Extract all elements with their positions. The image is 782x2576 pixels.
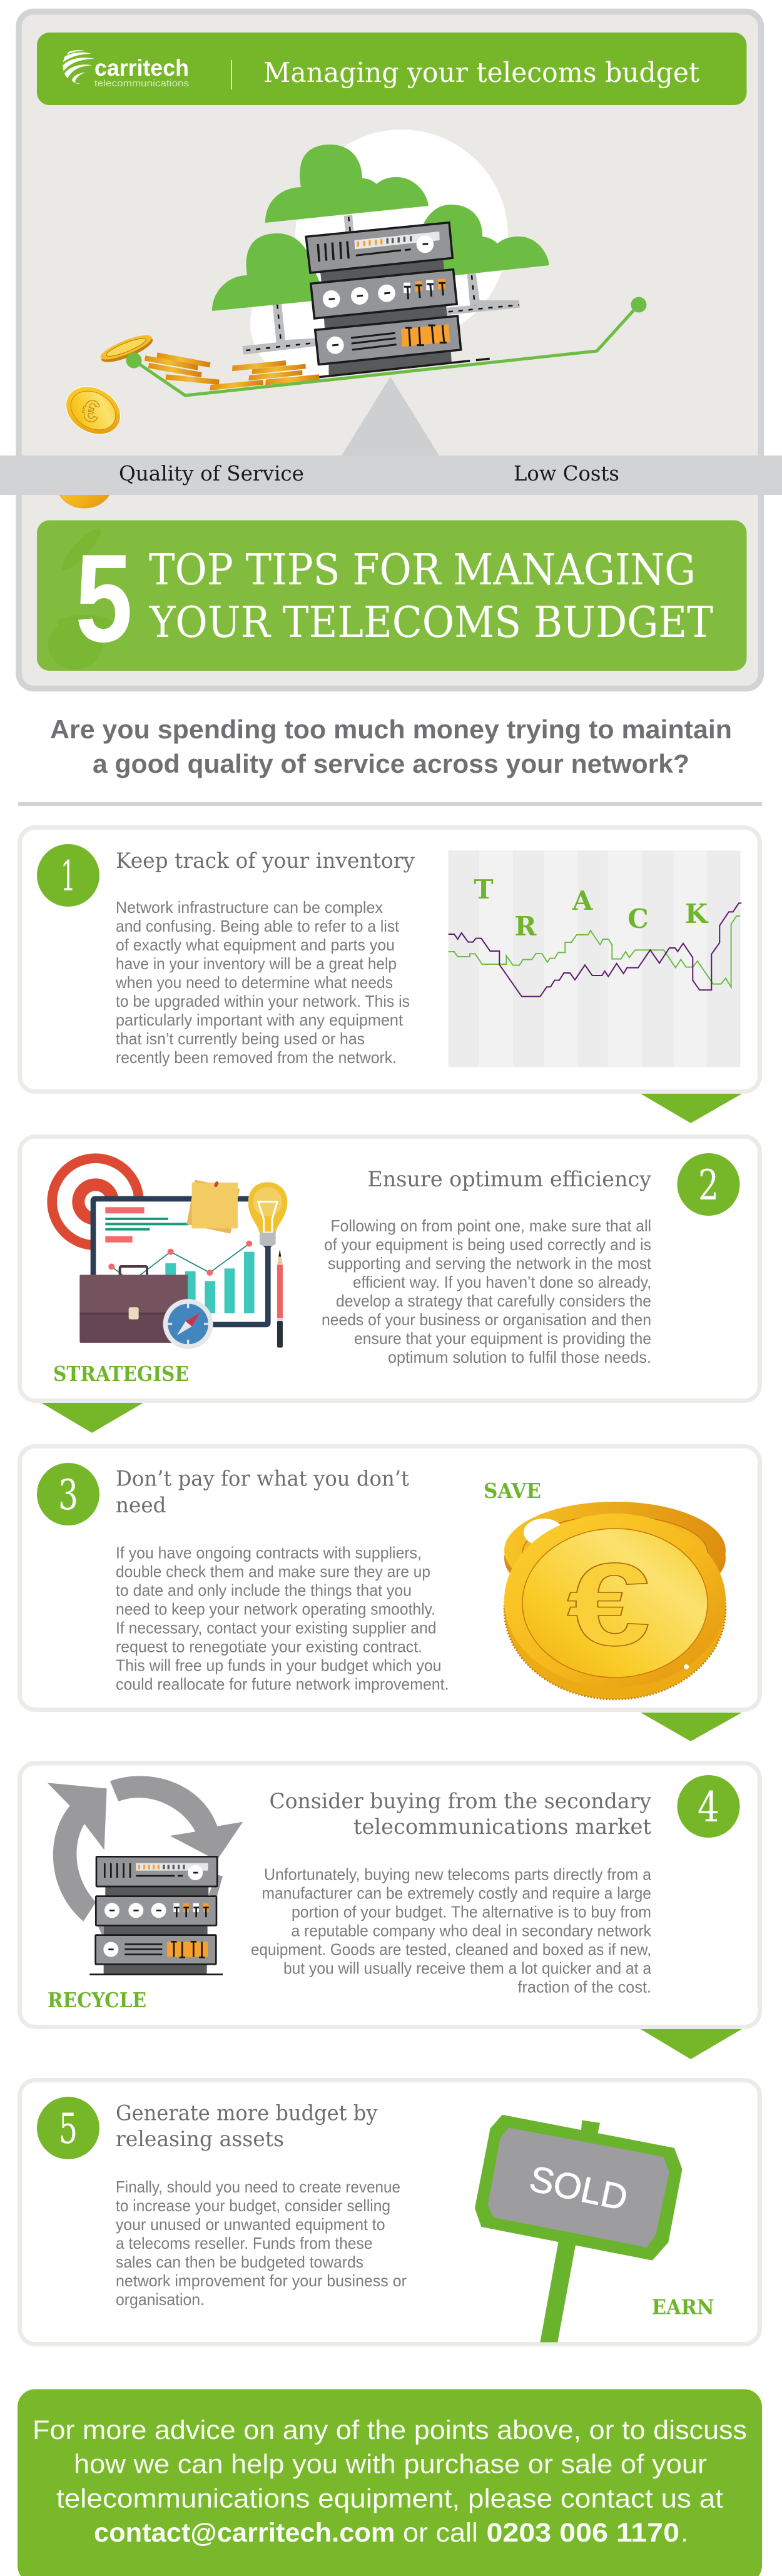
body text: fraction of the cost. bbox=[518, 1977, 651, 1996]
body text: could reallocate for future network improvement. bbox=[116, 1674, 449, 1693]
icon: sold sign: SOLD bbox=[526, 2158, 631, 2219]
body text: of exactly what equipment and parts you bbox=[116, 935, 395, 954]
heading: Generate more budget by bbox=[116, 2101, 378, 2126]
footer call to action: or call bbox=[403, 2518, 478, 2548]
label: earn: EARN bbox=[652, 2295, 714, 2319]
footer call to action: how we can help you with purchase or sale of your bbox=[74, 2449, 707, 2479]
body text: your unused or unwanted equipment to bbox=[116, 2215, 385, 2234]
body text: recently been removed from the network. bbox=[116, 1048, 397, 1067]
panel: tip 5 bbox=[20, 2080, 759, 2344]
panel: tip 1 bbox=[20, 827, 759, 1091]
heading: need bbox=[116, 1493, 166, 1518]
body text: double check them and make sure they are up bbox=[116, 1562, 430, 1581]
body text bbox=[116, 1543, 449, 1693]
body text: If necessary, contact your existing supplier and bbox=[116, 1618, 437, 1637]
number badge 4 bbox=[677, 1775, 739, 1838]
icon: fulcrum triangle bbox=[342, 377, 439, 456]
body text: needs of your business or organisation and then bbox=[322, 1310, 651, 1329]
label: recycle: RECYCLE bbox=[48, 1988, 146, 2012]
panel: hero bbox=[0, 11, 782, 688]
body text: but you will usually receive them a lot quicker and at a bbox=[283, 1958, 652, 1977]
number badge 2 bbox=[677, 1153, 739, 1216]
band: scale labels: Low Costs bbox=[514, 461, 619, 486]
band: scale labels: Quality of Service bbox=[119, 461, 304, 486]
footer call to action: . bbox=[681, 2518, 688, 2548]
icon: compass bbox=[163, 1299, 213, 1349]
body text: when you need to determine what needs bbox=[115, 973, 393, 992]
chart: track: T bbox=[474, 874, 494, 905]
footer call to action: telecommunications equipment, please contact us at bbox=[56, 2484, 723, 2514]
heading: Consider buying from the secondary bbox=[269, 1789, 652, 1814]
panel: tip 2 bbox=[20, 1136, 759, 1400]
body text: If you have ongoing contracts with suppliers, bbox=[116, 1543, 422, 1562]
icon: light bulb bbox=[248, 1182, 287, 1249]
band: scale labels bbox=[0, 456, 782, 495]
body text: and confusing. Being able to refer to a list bbox=[116, 917, 400, 935]
body text bbox=[116, 2177, 407, 2309]
question heading bbox=[50, 715, 732, 778]
heading bbox=[269, 1789, 652, 1840]
body text: manufacturer can be extremely costly and require a large bbox=[262, 1883, 651, 1902]
illustration: recycle server bbox=[48, 1776, 243, 1975]
icon: presentation board bbox=[93, 1199, 268, 1325]
icon: sold sign bbox=[475, 2115, 683, 2342]
body text: ensure that your equipment is providing the bbox=[354, 1329, 651, 1348]
header bar bbox=[37, 33, 747, 105]
body text: a telecoms reseller. Funds from these bbox=[116, 2234, 373, 2253]
icon: server stack bbox=[306, 223, 490, 377]
body text: sales can then be budgeted towards bbox=[116, 2253, 363, 2271]
icon: falling coins: € bbox=[79, 394, 102, 429]
number badge 1 bbox=[37, 844, 99, 907]
illustration: servers on clouds bbox=[212, 130, 549, 380]
number badge 1: 1 bbox=[61, 852, 76, 900]
footer call to action: contact@carritech.com bbox=[94, 2518, 395, 2548]
body text: a reputable company who deal in secondary network bbox=[292, 1921, 652, 1940]
body text bbox=[251, 1865, 652, 1996]
logo: carritech bbox=[63, 50, 189, 89]
body text bbox=[322, 1216, 652, 1367]
heading bbox=[116, 2101, 378, 2152]
body text: network improvement for your business or bbox=[116, 2271, 407, 2290]
icon: server stack bbox=[89, 1856, 223, 1975]
heading: Don’t pay for what you don’t bbox=[116, 1467, 409, 1492]
heading: Ensure optimum efficiency bbox=[368, 1167, 652, 1192]
icon: briefcase bbox=[79, 1266, 188, 1343]
body text: Following on from point one, make sure that all bbox=[330, 1216, 651, 1235]
icon: pencil bbox=[277, 1250, 283, 1348]
body text: This will free up funds in your budget which you bbox=[116, 1656, 442, 1674]
body text: to increase your budget, consider selling bbox=[116, 2196, 390, 2215]
body text: equipment. Goods are tested, cleaned and boxed as if new, bbox=[251, 1940, 651, 1958]
illustration: strategy bbox=[47, 1153, 287, 1349]
number badge 5: 5 bbox=[59, 2105, 78, 2153]
body text: Unfortunately, buying new telecoms parts directly from a bbox=[264, 1865, 652, 1883]
body text: need to keep your network operating smoothly. bbox=[116, 1599, 435, 1618]
icon: target bbox=[47, 1153, 144, 1250]
body text: develop a strategy that carefully considers the bbox=[336, 1291, 651, 1310]
footer call to action: For more advice on any of the points above, or to discuss bbox=[33, 2415, 747, 2445]
icon: gold euro coin bbox=[504, 1502, 726, 1699]
icon: falling coins bbox=[57, 330, 320, 508]
heading: telecommunications market bbox=[353, 1815, 651, 1840]
label: strategise: STRATEGISE bbox=[53, 1362, 189, 1386]
body text: particularly important with any equipment bbox=[116, 1011, 404, 1029]
question heading: Are you spending too much money trying to maintain bbox=[50, 715, 732, 744]
body text: Network infrastructure can be complex bbox=[116, 898, 383, 917]
body text: of your equipment is being used correctly and is bbox=[324, 1235, 651, 1254]
label: save: SAVE bbox=[484, 1479, 541, 1503]
body text: portion of your budget. The alternative is to buy from bbox=[292, 1902, 651, 1921]
banner: 5 top tips bbox=[37, 521, 747, 671]
chart: track: R bbox=[515, 911, 537, 942]
footer call to action bbox=[18, 2389, 762, 2576]
body text: supporting and serving the network in the most bbox=[328, 1254, 652, 1273]
body text: optimum solution to fulfil those needs. bbox=[388, 1348, 651, 1367]
heading: releasing assets bbox=[116, 2127, 284, 2152]
body text: request to renegotiate your existing contract. bbox=[116, 1637, 422, 1656]
arrow bbox=[641, 2029, 742, 2059]
body text: have in your inventory will be a great help bbox=[116, 954, 397, 973]
footer call to action: 0203 006 1170 bbox=[487, 2518, 679, 2548]
arrow bbox=[641, 1713, 742, 1741]
body text: organisation. bbox=[116, 2290, 205, 2309]
icon: recycle arrows bbox=[48, 1776, 243, 1935]
chart: track: C bbox=[627, 904, 649, 934]
body text: to be upgraded within your network. This is bbox=[116, 992, 410, 1011]
banner: 5 top tips: YOUR TELECOMS BUDGET bbox=[149, 598, 713, 648]
number badge 4: 4 bbox=[698, 1783, 719, 1831]
body text: that isn’t currently being used or has bbox=[116, 1029, 365, 1048]
question heading: a good quality of service across your network? bbox=[93, 749, 689, 778]
icon: clouds bbox=[212, 145, 549, 311]
number badge 3 bbox=[37, 1463, 99, 1525]
body text: to date and only include the things that you bbox=[116, 1581, 412, 1599]
chart: track: A bbox=[572, 885, 594, 916]
icon: sticky note bbox=[186, 1180, 240, 1234]
arrow bbox=[641, 1094, 742, 1123]
number badge 5 bbox=[37, 2097, 99, 2159]
panel: tip 4 bbox=[20, 1763, 759, 2027]
body text bbox=[115, 898, 410, 1067]
logo: carritech: telecommunications bbox=[94, 78, 189, 89]
arrow bbox=[41, 1403, 143, 1433]
body text: Finally, should you need to create revenue bbox=[116, 2177, 400, 2196]
number badge 2: 2 bbox=[698, 1161, 719, 1209]
icon: gold euro coin: € bbox=[567, 1539, 651, 1670]
logo: carritech: carritech bbox=[94, 55, 189, 81]
title: Managing your telecoms budget bbox=[263, 57, 699, 89]
chart: track: K bbox=[685, 899, 709, 929]
number badge 3: 3 bbox=[58, 1471, 78, 1519]
panel: tip 3 bbox=[20, 1447, 759, 1709]
icon: seesaw beam bbox=[126, 297, 647, 395]
heading bbox=[116, 1467, 409, 1518]
banner: 5 top tips: 5 bbox=[75, 529, 133, 668]
heading: Keep track of your inventory bbox=[116, 848, 415, 873]
chart: track bbox=[449, 850, 741, 1067]
banner: 5 top tips: TOP TIPS FOR MANAGING bbox=[149, 546, 696, 595]
body text: efficient way. If you haven’t done so already, bbox=[353, 1273, 651, 1291]
